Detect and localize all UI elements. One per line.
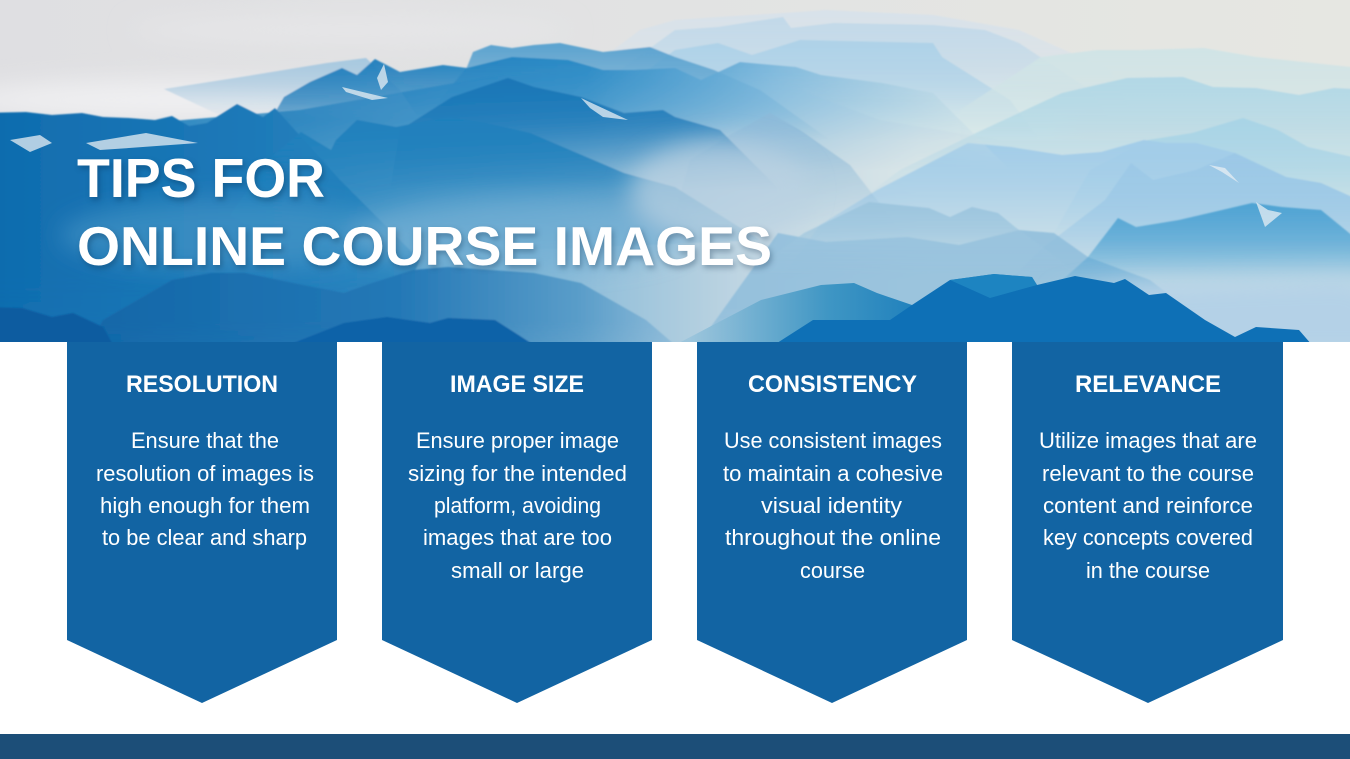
text: consistency tip	[723, 428, 943, 583]
footer bar	[0, 734, 1350, 759]
text: resolution tip	[96, 428, 314, 550]
title	[77, 147, 772, 277]
title: ONLINE COURSE IMAGES	[77, 215, 772, 277]
text: relevance tip: relevant to the course	[1042, 461, 1254, 486]
text: resolution tip: resolution of images is	[96, 461, 314, 486]
heading: consistency: CONSISTENCY	[748, 371, 917, 398]
title: TIPS FOR	[77, 147, 325, 209]
text: relevance tip	[1039, 428, 1257, 583]
text: consistency tip: Use consistent images	[724, 428, 942, 453]
text: consistency tip: to maintain a cohesive	[723, 461, 943, 486]
panel: relevance	[1012, 342, 1283, 703]
atmospheric haze over the valley	[60, 140, 810, 270]
hero photo: misty blue mountains	[0, 0, 1350, 360]
text: image size tip: platform, avoiding	[434, 493, 601, 518]
heading: image size: IMAGE SIZE	[450, 371, 584, 398]
text: image size tip: sizing for the intended	[408, 461, 627, 486]
text: consistency tip: visual identity	[761, 493, 902, 518]
text: relevance tip: in the course	[1086, 558, 1210, 583]
panel: consistency	[697, 342, 967, 703]
heading: resolution: RESOLUTION	[126, 371, 278, 398]
text: image size tip: small or large	[451, 558, 584, 583]
panel: resolution	[67, 342, 337, 703]
text: relevance tip: Utilize images that are	[1039, 428, 1257, 453]
text: image size tip: images that are too	[423, 525, 612, 550]
text: relevance tip: content and reinforce	[1043, 493, 1253, 518]
text: resolution tip: to be clear and sharp	[102, 525, 307, 550]
text: consistency tip: course	[800, 558, 865, 583]
text: relevance tip: key concepts covered	[1043, 525, 1253, 550]
text: image size tip: Ensure proper image	[416, 428, 619, 453]
text: resolution tip: high enough for them	[100, 493, 310, 518]
panel: image size	[382, 342, 652, 703]
heading: relevance: RELEVANCE	[1075, 371, 1221, 398]
text: consistency tip: throughout the online	[725, 525, 941, 550]
text: resolution tip: Ensure that the	[131, 428, 279, 453]
text: image size tip	[408, 428, 627, 583]
